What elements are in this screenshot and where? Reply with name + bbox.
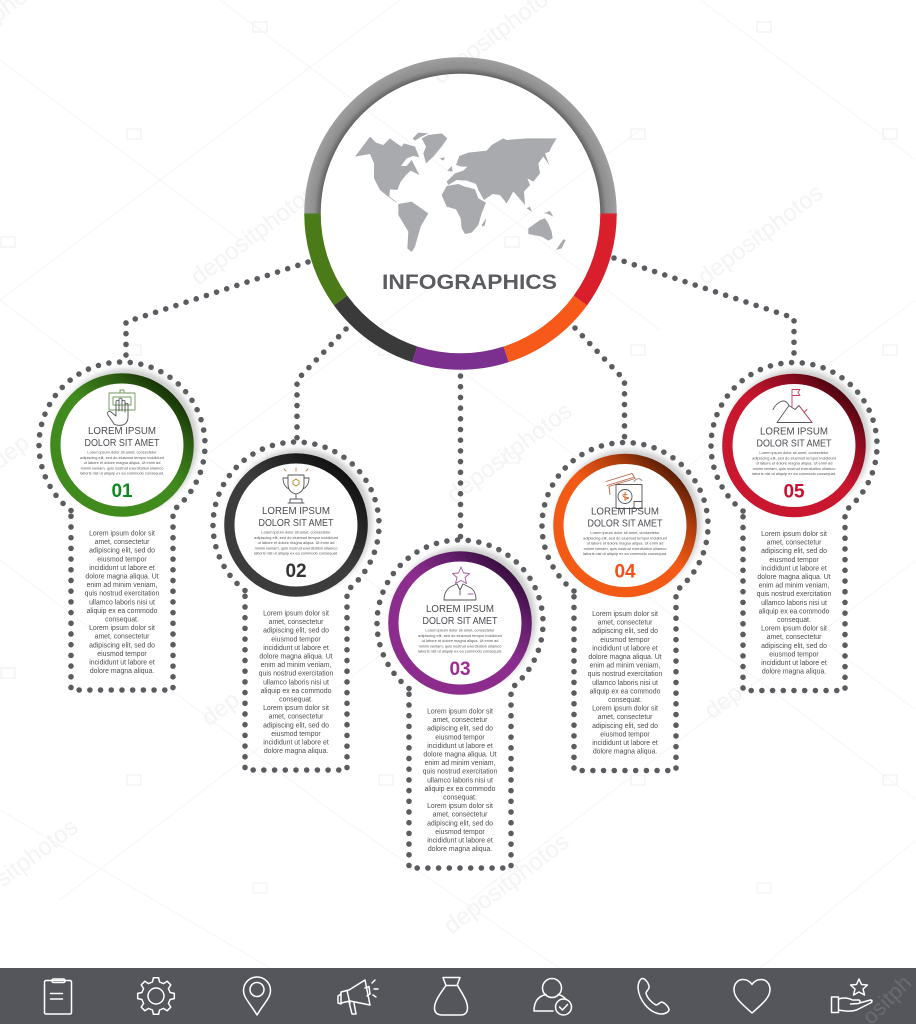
body text: eiusmod tempor <box>600 637 650 644</box>
body text: enim ad minim veniam, <box>261 662 332 669</box>
body text: quis nostrud exercitation <box>423 769 498 776</box>
small description: laboris nisi ut aliquip ex ea commodo consequat. <box>583 551 667 556</box>
icon: megaphone <box>338 980 378 1014</box>
small description: adipiscing elit, sed do eiusmod tempor incididunt <box>80 455 165 460</box>
body text: adipiscing elit, sed do <box>263 722 329 729</box>
body text: ullamco laboris nisi ut <box>89 599 155 606</box>
icon: card and money <box>606 474 642 508</box>
heading: DOLOR SIT AMET <box>258 518 334 529</box>
body text: dolore magna aliqua. <box>762 669 826 676</box>
heading: DOLOR SIT AMET <box>588 518 662 530</box>
small description: adipiscing elit, sed do eiusmod tempor incididunt <box>583 535 668 540</box>
ring <box>388 547 536 695</box>
ring segment: red <box>580 214 609 300</box>
small description: adipiscing elit, sed do eiusmod tempor incididunt <box>752 455 837 460</box>
background watermark: depositphotos <box>442 397 577 509</box>
background watermark: dep <box>196 686 245 732</box>
heading: LOREM IPSUM <box>88 426 156 437</box>
body text: eiusmod tempor <box>769 557 819 564</box>
ring <box>50 369 198 517</box>
panel 03 <box>377 540 543 868</box>
small description <box>80 450 165 476</box>
body text <box>259 610 334 755</box>
body text: amet, consectetur <box>269 619 324 626</box>
icon: money bag <box>434 978 468 1015</box>
body text: quis nostrud exercitation <box>259 671 334 678</box>
body text: ullamco laboris nisi ut <box>761 600 827 607</box>
body text: Lorem ipsum dolor sit <box>761 531 827 538</box>
small description: minim veniam, quis nostrud exercitation ullamco <box>419 643 501 648</box>
bottom icon bar <box>0 968 916 1024</box>
connector 05 <box>614 258 794 361</box>
ring segment: orange <box>506 300 580 354</box>
body text: aliquip ex ea commodo <box>87 608 158 615</box>
heading: LOREM IPSUM <box>262 506 330 517</box>
body text: adipiscing elit, sed do <box>89 548 155 555</box>
body text: adipiscing elit, sed do <box>592 628 658 635</box>
bar background <box>0 968 916 1024</box>
dotted keyhole outline <box>711 363 877 691</box>
background watermark: depositphotos <box>186 179 321 291</box>
main title: INFOGRAPHICS <box>382 270 557 294</box>
small description <box>752 450 837 476</box>
icon: star and person <box>444 567 476 600</box>
dotted keyhole outline <box>377 540 543 868</box>
body text: amet, consectetur <box>95 634 150 641</box>
body text: aliquip ex ea commodo <box>590 688 661 695</box>
body text: incididunt ut labore et <box>263 740 329 746</box>
icon: map pin <box>244 977 270 1015</box>
body text: adipiscing elit, sed do <box>761 548 827 555</box>
icon: phone <box>638 979 669 1014</box>
body text: dolore magna aliqua. Ut <box>757 574 831 581</box>
body text: amet, consectetur <box>767 634 822 641</box>
body text: adipiscing elit, sed do <box>592 723 658 730</box>
body text: Lorem ipsum dolor sit <box>89 530 155 538</box>
body text: aliquip ex ea commodo <box>261 688 332 695</box>
small description: adipiscing elit, sed do eiusmod tempor incididunt <box>254 535 339 540</box>
heading <box>588 506 662 530</box>
body text: dolore magna aliqua. Ut <box>423 752 497 758</box>
icon: heart <box>734 980 770 1013</box>
body text: ullamco laboris nisi ut <box>263 679 329 686</box>
body text: enim ad minim veniam, <box>425 760 496 767</box>
body text: dolore magna aliqua. Ut <box>259 654 333 660</box>
body text: amet, consectetur <box>598 714 653 721</box>
body text: eiusmod tempor <box>769 651 819 658</box>
heading: DOLOR SIT AMET <box>422 616 498 627</box>
body text: quis nostrud exercitation <box>85 591 160 598</box>
body text: eiusmod tempor <box>435 829 485 836</box>
ring <box>224 449 372 597</box>
small description: laboris nisi ut aliquip ex ea commodo consequat. <box>418 649 502 654</box>
dotted keyhole outline <box>542 443 708 771</box>
body text: eiusmod tempor <box>271 636 321 643</box>
ring segment: dark <box>341 300 415 354</box>
small description: Lorem ipsum dolor sit amet, consectetur <box>87 450 157 454</box>
small description: minim veniam, quis nostrud exercitation ullamco <box>81 465 163 470</box>
connector lines <box>126 258 794 540</box>
body text: incididunt ut labore et <box>89 565 155 572</box>
icon: hand with star <box>832 979 872 1012</box>
body text: eiusmod tempor <box>435 734 485 741</box>
body text: Lorem ipsum dolor sit <box>89 625 155 632</box>
background watermark: depositphotos <box>439 828 574 940</box>
connector 02 <box>297 329 346 441</box>
small description: minim veniam, quis nostrud exercitation ullamco <box>584 546 666 551</box>
dotted keyhole outline <box>39 362 205 690</box>
background watermark: dep <box>699 679 748 725</box>
body text: incididunt ut labore et <box>427 838 493 844</box>
ring <box>722 370 870 517</box>
small description: Lorem ipsum dolor sit amet, consectetur <box>759 450 829 455</box>
small description <box>254 530 339 556</box>
number: 03 <box>449 659 471 680</box>
number: 04 <box>614 562 636 582</box>
main circle <box>312 66 609 362</box>
body text: Lorem ipsum dolor sit <box>592 706 658 713</box>
body text: dolore magna aliqua. <box>264 748 328 755</box>
heading <box>756 426 832 450</box>
small description: laboris nisi ut aliquip ex ea commodo consequat. <box>80 471 164 476</box>
number: 02 <box>285 561 307 582</box>
body text: adipiscing elit, sed do <box>427 726 493 733</box>
body text: adipiscing elit, sed do <box>89 642 155 649</box>
panel 02 <box>213 442 379 770</box>
body text: ullamco laboris nisi ut <box>592 680 658 687</box>
small description: laboris nisi ut aliquip ex ea commodo consequat. <box>254 551 338 556</box>
connector 03 <box>458 376 463 540</box>
body text: consequat. <box>777 617 811 624</box>
body text: Lorem ipsum dolor sit <box>427 708 493 716</box>
number: 01 <box>111 481 133 502</box>
icon: flag and mountain <box>773 390 812 422</box>
panel 04 <box>542 443 708 771</box>
body text: enim ad minim veniam, <box>759 583 830 590</box>
heading: LOREM IPSUM <box>760 426 828 438</box>
body text: Lorem ipsum dolor sit <box>427 803 493 810</box>
small description: ut labore et dolore magna aliqua. Ut enim ad <box>587 541 663 546</box>
heading: LOREM IPSUM <box>426 604 494 615</box>
body text: incididunt ut labore et <box>89 660 155 666</box>
body text: dolore magna aliqua. Ut <box>85 574 159 580</box>
heading <box>422 604 498 627</box>
body text: amet, consectetur <box>598 620 653 627</box>
body text: incididunt ut labore et <box>592 740 658 747</box>
icon: VR hand <box>107 390 135 425</box>
small description: adipiscing elit, sed do eiusmod tempor incididunt <box>418 633 503 638</box>
body text <box>423 708 498 853</box>
small description: ut labore et dolore magna aliqua. Ut enim ad <box>258 540 334 545</box>
small description <box>583 530 668 556</box>
heading: DOLOR SIT AMET <box>84 438 160 449</box>
body text: dolore magna aliqua. <box>428 846 492 853</box>
body text: incididunt ut labore et <box>592 645 658 652</box>
body text: incididunt ut labore et <box>761 660 827 667</box>
heading <box>84 426 160 449</box>
body text: dolore magna aliqua. <box>90 668 154 675</box>
small description: Lorem ipsum dolor sit amet, consectetur <box>261 530 331 534</box>
body text: eiusmod tempor <box>97 556 147 563</box>
number: 05 <box>783 482 805 502</box>
icon: trophy <box>283 468 309 503</box>
connector 04 <box>575 328 624 441</box>
body text: adipiscing elit, sed do <box>263 628 329 635</box>
body text: incididunt ut labore et <box>761 565 827 572</box>
body text: dolore magna aliqua. <box>593 749 657 756</box>
body text: quis nostrud exercitation <box>588 671 663 678</box>
body text: quis nostrud exercitation <box>757 591 832 598</box>
ring segment: gray <box>312 66 608 214</box>
small description: ut labore et dolore magna aliqua. Ut enim ad <box>756 461 832 466</box>
body text: eiusmod tempor <box>97 651 147 658</box>
body text: consequat. <box>279 696 313 704</box>
body text: adipiscing elit, sed do <box>761 643 827 650</box>
body text: amet, consectetur <box>433 812 488 819</box>
connector 01 <box>126 262 308 360</box>
ring <box>553 450 701 597</box>
body text: Lorem ipsum dolor sit <box>592 611 658 618</box>
heading: DOLOR SIT AMET <box>756 438 832 450</box>
small description: laboris nisi ut aliquip ex ea commodo consequat. <box>752 471 836 476</box>
body text: amet, consectetur <box>269 714 324 721</box>
small description: minim veniam, quis nostrud exercitation ullamco <box>753 466 835 471</box>
body text: Lorem ipsum dolor sit <box>761 626 827 633</box>
small description: ut labore et dolore magna aliqua. Ut enim ad <box>84 460 160 465</box>
body text: ullamco laboris nisi ut <box>427 777 493 784</box>
body text: eiusmod tempor <box>600 731 650 738</box>
heading <box>258 506 334 529</box>
body text: incididunt ut labore et <box>263 645 329 652</box>
small description <box>418 628 503 654</box>
body text: incididunt ut labore et <box>427 743 493 750</box>
body text: enim ad minim veniam, <box>87 582 158 589</box>
body text: amet, consectetur <box>95 539 150 546</box>
icon: user with check <box>534 978 572 1015</box>
icon: clipboard <box>44 979 72 1014</box>
body text: aliquip ex ea commodo <box>425 786 496 793</box>
panel 05 <box>711 363 877 691</box>
body text: consequat. <box>105 616 139 624</box>
body text: amet, consectetur <box>767 540 822 547</box>
body text: amet, consectetur <box>433 717 488 724</box>
heading: LOREM IPSUM <box>591 506 659 518</box>
body text <box>757 531 832 676</box>
panel 01 <box>39 362 205 690</box>
small description: Lorem ipsum dolor sit amet, consectetur <box>425 628 495 632</box>
small description: Lorem ipsum dolor sit amet, consectetur <box>590 530 660 535</box>
small description: minim veniam, quis nostrud exercitation ullamco <box>255 545 337 550</box>
body text: consequat. <box>608 697 642 704</box>
background watermark: depositphotos <box>693 179 828 291</box>
body text: Lorem ipsum dolor sit <box>263 705 329 712</box>
body text: adipiscing elit, sed do <box>427 820 493 827</box>
body text: Lorem ipsum dolor sit <box>263 610 329 618</box>
body text <box>588 611 663 756</box>
icon: gear <box>138 978 174 1014</box>
body text: eiusmod tempor <box>271 731 321 738</box>
small description: ut labore et dolore magna aliqua. Ut enim ad <box>422 638 498 643</box>
ring segment: purple <box>415 354 506 362</box>
ring segment: green <box>312 214 341 300</box>
world map <box>355 133 566 252</box>
body text: enim ad minim veniam, <box>590 663 661 670</box>
body text: aliquip ex ea commodo <box>759 608 830 615</box>
dotted keyhole outline <box>213 442 379 770</box>
body text <box>85 530 160 675</box>
body text: dolore magna aliqua. Ut <box>588 654 662 661</box>
body text: consequat. <box>443 794 477 802</box>
